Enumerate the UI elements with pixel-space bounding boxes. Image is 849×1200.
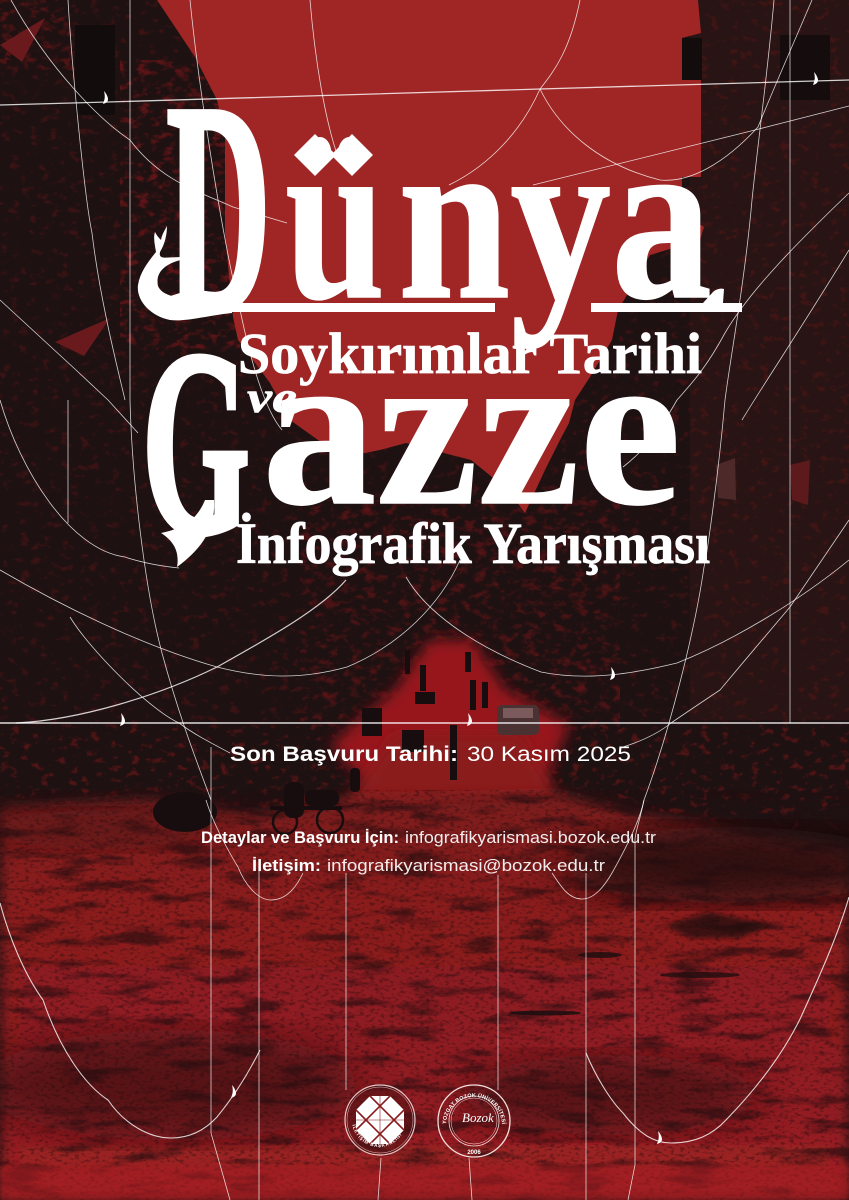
street figures and vehicles [153, 650, 539, 834]
logo: İletişim Başkanlığı [344, 1084, 416, 1156]
logo: Yozgat Bozok Üniversitesi: Bozok [462, 1110, 494, 1125]
title: Dünya [138, 40, 712, 376]
deadline text: Son Başvuru Tarihi: [230, 742, 458, 766]
details line: infografikyarismasi.bozok.edu.tr [405, 829, 657, 847]
details line: Detaylar ve Başvuru İçin: [201, 829, 399, 847]
logo: Yozgat Bozok Üniversitesi: 2006 [467, 1150, 481, 1156]
title: Gazze [142, 297, 681, 590]
title: Dünya: ü [285, 86, 385, 349]
sky [157, 0, 704, 513]
icon: birds on strings [103, 72, 818, 1144]
title: Gazze: azze [262, 302, 681, 552]
red road [0, 640, 849, 815]
title: Dünya: D [166, 40, 271, 376]
G tail swash [161, 500, 214, 567]
title underline with bird [232, 289, 742, 312]
icon: D swash and dove [138, 226, 232, 320]
contact line: infografikyarismasi@bozok.edu.tr [327, 857, 606, 875]
title: Gazze: G [142, 297, 250, 590]
logo: Yozgat Bozok Üniversitesi: YOZGAT BOZOK ÜNİVERSİTESİ [442, 1092, 507, 1124]
subtitle: İnfografik Yarışması: İnfografik Yarışması [236, 511, 710, 576]
title: Dünya: nya [398, 86, 712, 349]
deadline text: 30 Kasım 2025 [467, 742, 631, 766]
subtitle: ve: ve [247, 373, 297, 422]
icon: ü diamonds [294, 134, 373, 176]
logo: İletişim Başkanlığı: İLETİŞİM BAŞKANLIĞI [352, 1124, 402, 1148]
ground [0, 790, 849, 1200]
logo: Yozgat Bozok Üniversitesi [437, 1084, 511, 1158]
contact line: İletişim: [252, 857, 321, 875]
subtitle: Soykırımlar Tarihi: Soykırımlar Tarihi [238, 321, 702, 386]
